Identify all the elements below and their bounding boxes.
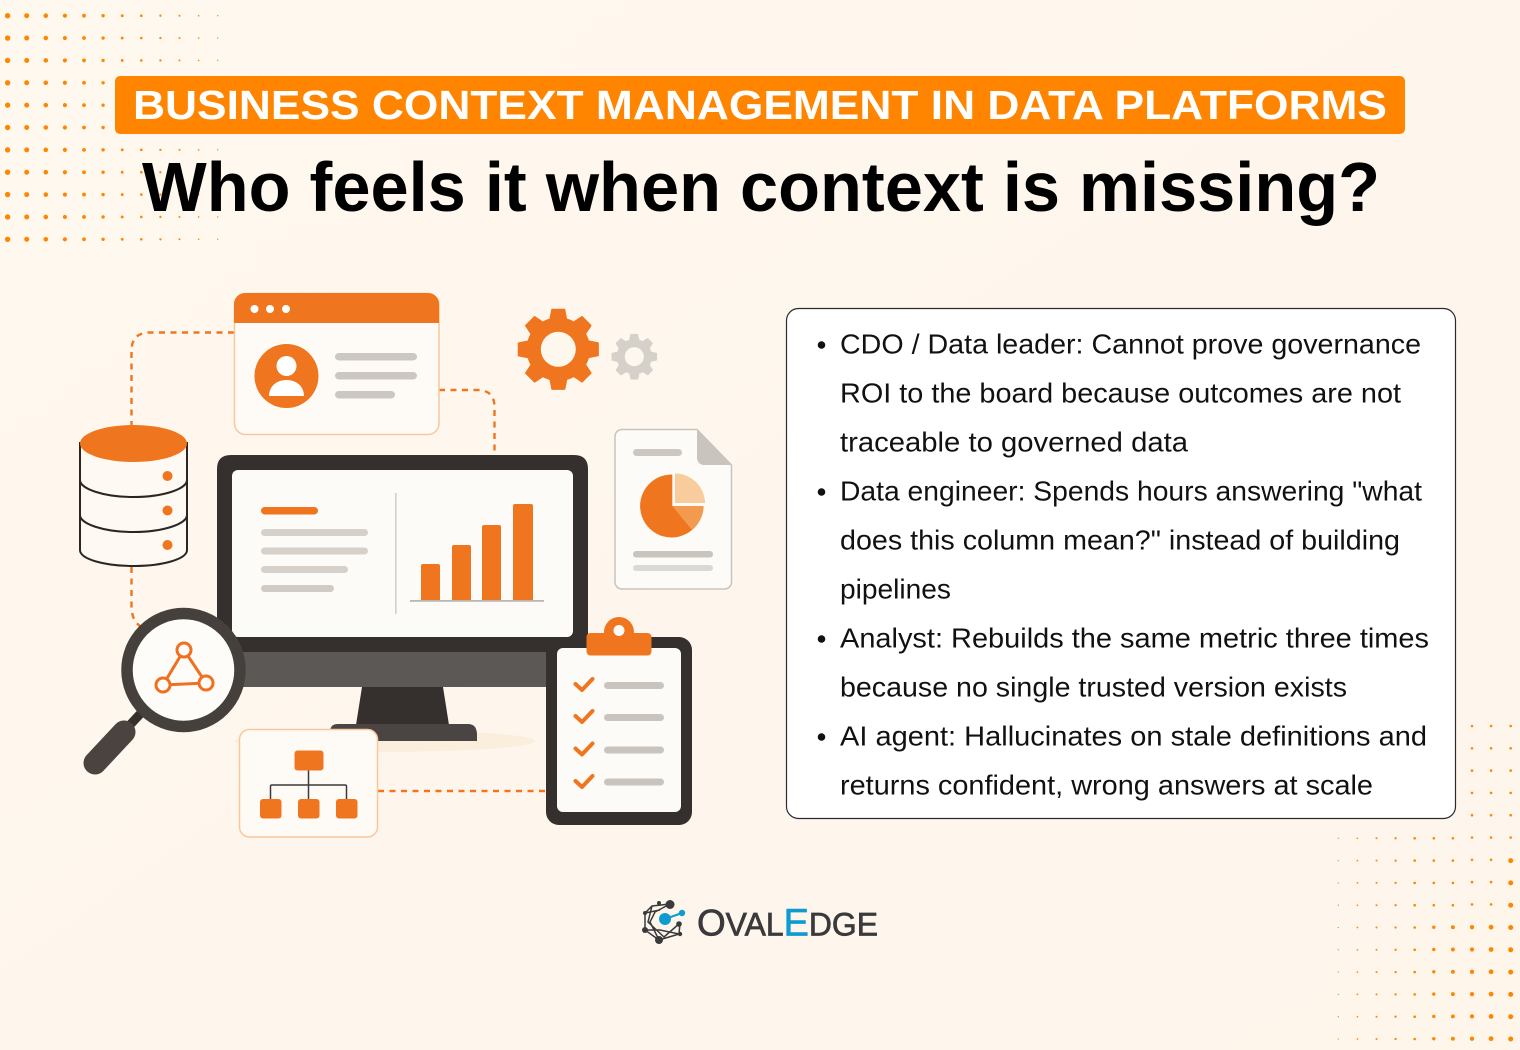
bullet: Data engineer: does this column mean?" instead of building [840, 524, 1400, 556]
bar chart [410, 504, 544, 602]
icon: desktop monitor with dashboard [217, 455, 588, 752]
icon: clipboard checklist [546, 617, 692, 825]
logo: OvalEdge: OVALEDGE [697, 902, 878, 944]
icon: small grey gear [612, 334, 656, 379]
bullet: CDO / Data leader: CDO / Data leader: Cannot prove governance [840, 328, 1421, 360]
icon: large orange gear [518, 310, 598, 389]
banner: BUSINESS CONTEXT MANAGEMENT IN DATA PLATFORMS [133, 82, 1387, 128]
icon: magnifying glass with network [95, 614, 240, 763]
bullet: AI agent: returns confident, wrong answers at scale [840, 770, 1373, 800]
icon: profile window [234, 293, 439, 434]
panel: who feels it list [786, 308, 1456, 818]
icon: org chart card [240, 730, 378, 837]
bullet: CDO / Data leader: ROI to the board because outcomes are not [840, 378, 1401, 408]
bullet: AI agent: AI agent: Hallucinates on stale definitions and [840, 720, 1427, 752]
bullet: Data engineer: pipelines [840, 574, 951, 604]
decorative dot grid: top left [8, 16, 218, 240]
bullet: Data engineer [818, 476, 1422, 604]
bullet: Analyst [818, 622, 1429, 702]
bullet: Analyst: because no single trusted version exists [840, 672, 1347, 702]
icon: report document [615, 430, 732, 589]
bullet: Analyst: Analyst: Rebuilds the same metric three times [840, 622, 1429, 654]
bullet: CDO / Data leader: traceable to governed data [840, 426, 1189, 458]
icon: database cylinder [80, 425, 187, 566]
bullet: Data engineer: Data engineer: Spends hours answering "what [840, 476, 1422, 506]
bullet: CDO / Data leader [818, 328, 1421, 458]
dashed connectors [132, 332, 547, 791]
decorative dot grid: bottom right [1338, 726, 1511, 1040]
title: Who feels it when context is missing? [142, 148, 1380, 226]
bullet: AI agent [818, 720, 1427, 800]
